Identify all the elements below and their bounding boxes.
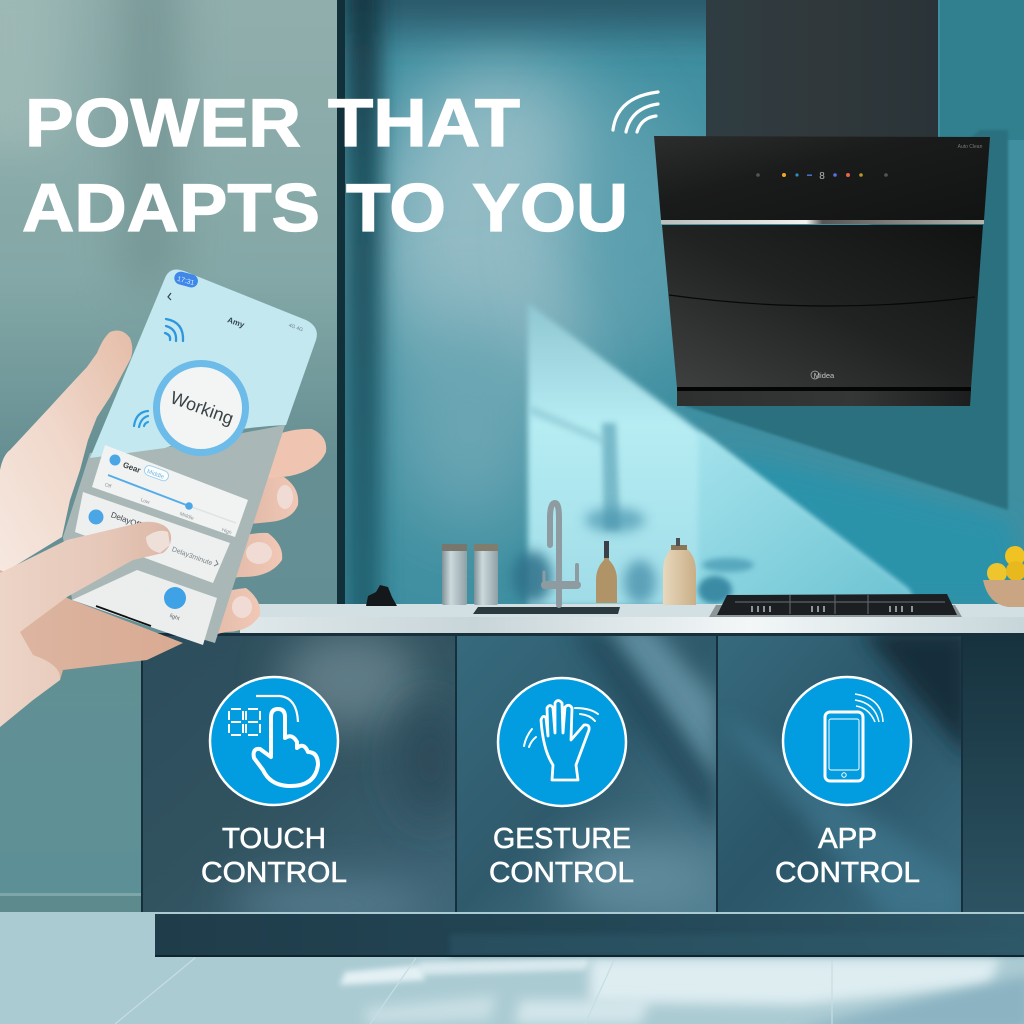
- countertop items: [366, 503, 1024, 617]
- control panel: [756, 144, 983, 182]
- back wall with sunlight: [337, 0, 1024, 650]
- hood upper glass panel: [654, 136, 990, 220]
- steel jars: [442, 544, 498, 605]
- status icons: 4G 4G: [288, 323, 304, 333]
- fingernails: [232, 485, 293, 618]
- title: THAT: [328, 85, 520, 161]
- range hood: [654, 0, 990, 406]
- hand holding phone: [0, 270, 326, 727]
- feature: gesture control: [489, 678, 634, 889]
- black ornament: [366, 585, 397, 606]
- control panel: 8: [819, 171, 825, 182]
- seven segment digits: [229, 709, 260, 735]
- ceramic bottle: [663, 548, 696, 605]
- title: POWER: [25, 85, 301, 161]
- plinth: [155, 914, 1024, 956]
- window frame shadow: [602, 423, 620, 530]
- label: TOUCH: [222, 823, 326, 855]
- label: CONTROL: [201, 857, 347, 889]
- label: [489, 823, 634, 889]
- delay card: [75, 492, 230, 583]
- gear card: Off: [104, 482, 112, 490]
- fingers behind phone: [195, 429, 326, 640]
- cabinet door 1: [143, 630, 460, 930]
- sink: [473, 607, 620, 614]
- cabinet door 3: [718, 630, 970, 920]
- icon: wifi signal: [613, 92, 658, 132]
- delay card: DelayOff: [110, 510, 143, 530]
- hood shadow: [685, 130, 1008, 510]
- wifi icon upper: [165, 319, 183, 341]
- hood base: [677, 387, 971, 406]
- control panel: Auto Clean: [958, 144, 983, 150]
- small bottle: [596, 556, 617, 603]
- floor: [0, 912, 1024, 1024]
- title: TO: [346, 170, 446, 246]
- icon: smartphone: [783, 677, 911, 805]
- plant shadows: [512, 551, 552, 603]
- cabinets: [141, 625, 1024, 930]
- phone glass upper: [90, 270, 317, 458]
- brand logo: Midea: [814, 371, 835, 380]
- gear card: Low: [140, 497, 151, 506]
- light card: [72, 570, 217, 645]
- status time: [173, 270, 199, 289]
- light card: light: [169, 613, 181, 622]
- phone: [63, 270, 317, 645]
- lower palm: [0, 570, 183, 727]
- icon: waving hand: [498, 678, 626, 806]
- user name: Amy: [226, 315, 246, 330]
- steel strip: [661, 220, 984, 224]
- label: [775, 823, 920, 889]
- sun patches: [340, 958, 1000, 1024]
- gear card: Middle: [146, 469, 165, 481]
- cabinet door 4: [963, 636, 1024, 912]
- title: YOU: [472, 170, 628, 246]
- working status dial: [153, 360, 249, 456]
- status time: 17:31: [176, 276, 195, 287]
- left wall: [0, 0, 337, 915]
- wifi icon lower: [134, 411, 148, 427]
- label: GESTURE: [493, 823, 631, 855]
- fingertip nail: [146, 531, 170, 553]
- gear card: [92, 445, 248, 537]
- phone glass lower: [63, 425, 285, 643]
- faucet: [544, 503, 577, 605]
- label: [201, 823, 347, 889]
- sunlight wedge: [740, 454, 1023, 604]
- palm and thumb: [0, 330, 132, 575]
- hood lower glass panel: [662, 225, 983, 388]
- fruit bowl: [983, 546, 1024, 607]
- feature: touch control: [201, 677, 347, 889]
- delay card: Delay3minute: [171, 546, 213, 567]
- chimney: [706, 0, 938, 137]
- label: CONTROL: [775, 857, 920, 889]
- kitchen counter: [143, 604, 1024, 636]
- label: CONTROL: [489, 857, 634, 889]
- back arrow: [168, 293, 171, 300]
- title: ADAPTS: [22, 170, 320, 246]
- pointing finger: [0, 522, 171, 727]
- gear card: Middle: [179, 511, 195, 522]
- title: [22, 85, 628, 246]
- working status dial: Working: [168, 387, 236, 429]
- gas cooktop: [709, 594, 962, 617]
- gear card: Gear: [122, 460, 142, 475]
- icon: touch: [210, 677, 338, 805]
- cabinet door 2: [457, 625, 720, 920]
- feature: app control: [775, 677, 920, 889]
- gear card: High: [221, 527, 233, 536]
- label: APP: [818, 823, 877, 855]
